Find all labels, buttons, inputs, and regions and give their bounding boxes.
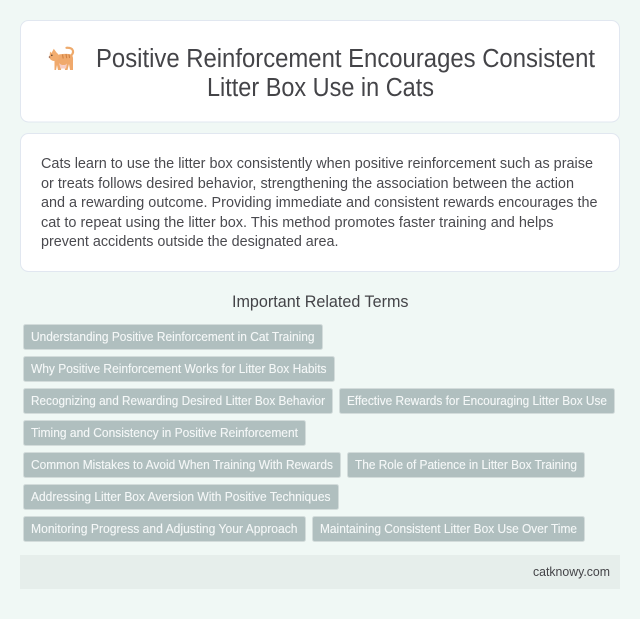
panel: title card xyxy=(20,20,620,122)
panel: description card xyxy=(20,134,620,272)
title: Litter Box Use in Cats xyxy=(207,74,434,102)
chip: monitoring xyxy=(24,516,306,542)
chip: aversion: Addressing Litter Box Aversion With Positive Techniques xyxy=(31,490,330,504)
chip: common mistakes: Common Mistakes to Avoid When Training With Rewards xyxy=(31,458,333,472)
chip: monitoring: Monitoring Progress and Adjusting Your Approach xyxy=(31,522,298,536)
chip: effective rewards xyxy=(340,388,614,414)
chip: maintaining xyxy=(312,516,584,542)
text block: description: or treats follows desired behavior, strengthening the association between the action xyxy=(41,175,574,192)
footer bar xyxy=(20,555,620,589)
chip: maintaining: Maintaining Consistent Litter Box Use Over Time xyxy=(320,522,577,536)
chip: why it works xyxy=(24,356,334,382)
title: Positive Reinforcement Encourages Consistent xyxy=(96,45,595,73)
chip: recognizing: Recognizing and Rewarding Desired Litter Box Behavior xyxy=(31,394,325,408)
chip: understanding xyxy=(24,324,322,350)
text block: description: prevent accidents outside the designated area. xyxy=(41,233,338,250)
text block: description: Cats learn to use the litter box consistently when positive reinforcement such as praise xyxy=(41,155,593,172)
title xyxy=(96,45,595,102)
chip: common mistakes xyxy=(24,452,340,478)
chip: recognizing xyxy=(24,388,332,414)
chip group: related terms xyxy=(24,324,614,542)
chip: timing xyxy=(24,420,306,446)
footer source: catknowy.com xyxy=(533,564,610,579)
text block: description: cat to repeat using the litter box. This method promotes faster training and helps xyxy=(41,214,554,231)
chip: patience: The Role of Patience in Litter Box Training xyxy=(355,458,577,472)
chip: effective rewards: Effective Rewards for Encouraging Litter Box Use xyxy=(347,394,607,408)
chip: timing: Timing and Consistency in Positive Reinforcement xyxy=(31,426,298,440)
heading: important related terms: Important Related Terms xyxy=(232,293,408,311)
chip: why it works: Why Positive Reinforcement Works for Litter Box Habits xyxy=(31,362,326,376)
icon: orange cat xyxy=(49,48,73,70)
chip: patience xyxy=(348,452,584,478)
text block: description xyxy=(41,155,598,250)
chip: aversion xyxy=(24,484,338,510)
chip: understanding: Understanding Positive Reinforcement in Cat Training xyxy=(31,330,315,344)
text block: description: and a rewarding outcome. Providing immediate and consistent rewards encourages the xyxy=(41,194,598,211)
